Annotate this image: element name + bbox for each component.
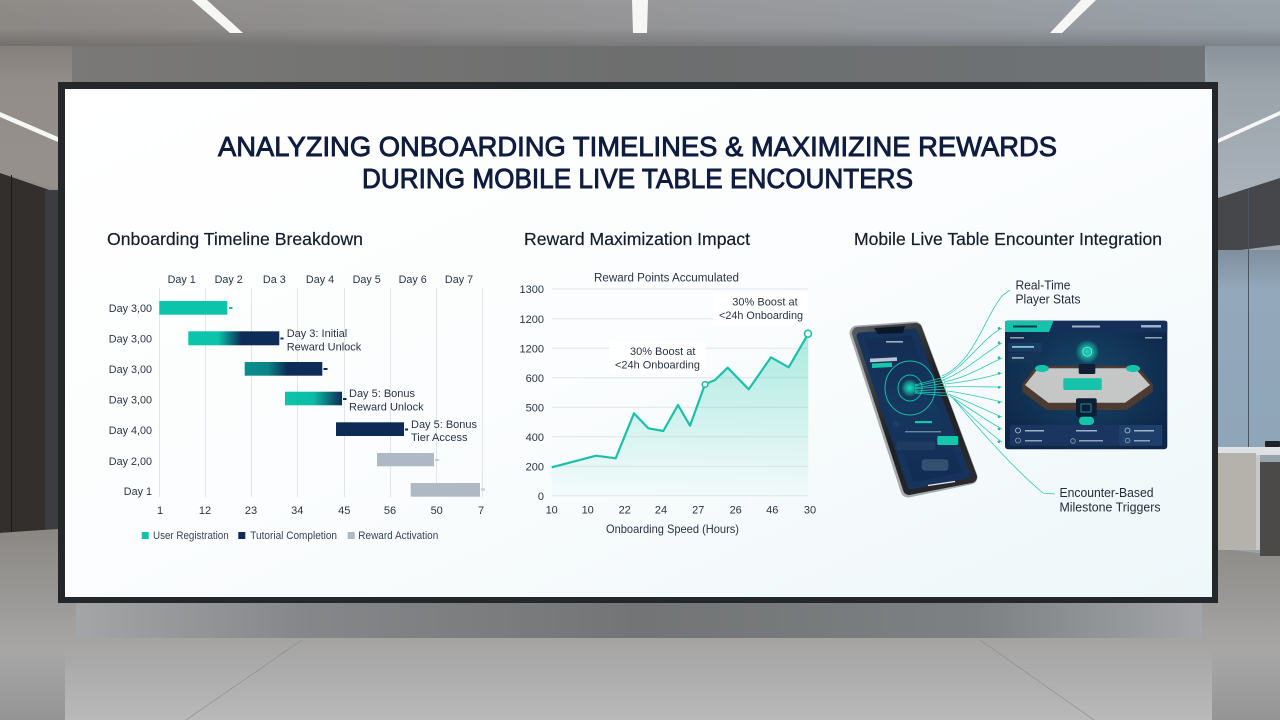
x axis labels: 22 (619, 504, 631, 516)
label: milestone triggers: Milestone Triggers (1060, 500, 1160, 514)
bottom axis: 50 (431, 505, 443, 517)
y axis labels: 200 (526, 462, 544, 474)
x axis labels (546, 504, 816, 516)
day column headers: Da 3 (263, 274, 286, 286)
x axis labels: 10 (582, 504, 594, 516)
dashboard (1005, 321, 1167, 449)
bottom axis: 1 (157, 505, 163, 517)
y axis labels: 500 (526, 402, 544, 414)
bar annotations: Day 5: Bonus (349, 388, 416, 400)
day column headers: Day 4 (306, 274, 334, 286)
row labels (109, 303, 152, 498)
row labels: Day 1 (124, 486, 152, 498)
x axis labels: 46 (766, 504, 778, 516)
y axis labels: 1200 (520, 344, 544, 356)
legend (142, 530, 438, 542)
x axis labels: 27 (692, 504, 704, 516)
y axis labels: 600 (526, 373, 544, 385)
label: real-time stats: Real-Time (1016, 278, 1071, 292)
dashboard stats strip (1010, 425, 1162, 446)
row labels: Day 3,00 (109, 394, 152, 406)
bottom axis: 45 (338, 505, 350, 517)
x axis labels: 30 (804, 504, 816, 516)
day column headers: Day 1 (168, 274, 196, 286)
poker table (1022, 340, 1153, 425)
x axis labels: 24 (655, 504, 667, 516)
bottom axis: 34 (291, 505, 303, 517)
callout: mid boost: <24h Onboarding (615, 359, 700, 371)
bottom axis: 56 (384, 505, 396, 517)
area under line (552, 334, 808, 496)
bar annotations (287, 328, 478, 444)
x axis labels: 26 (730, 504, 742, 516)
x axis title: Onboarding Speed (Hours) (606, 522, 739, 536)
bar annotations: Tier Access (411, 432, 468, 444)
y axis labels: 1200 (520, 314, 544, 326)
bar annotations: Reward Unlock (349, 402, 424, 414)
callout: top boost: <24h Onboarding (719, 310, 803, 322)
label: real-time stats: Player Stats (1016, 292, 1080, 306)
heading: onboarding timeline: Onboarding Timeline Breakdown (107, 229, 363, 249)
day column headers: Day 2 (215, 274, 243, 286)
phone signal rays (915, 377, 949, 396)
row labels: Day 4,00 (109, 425, 152, 437)
y axis labels: 1300 (520, 284, 544, 296)
row labels: Day 2,00 (109, 456, 152, 468)
label: milestone triggers: Encounter-Based (1060, 486, 1154, 500)
panel: onboarding timeline (107, 229, 485, 542)
row labels: Day 3,00 (109, 303, 152, 315)
bar annotations: Day 5: Bonus (411, 419, 478, 431)
day column headers (168, 274, 473, 286)
y axis labels (520, 284, 544, 503)
pedestal (76, 600, 1202, 638)
bottom axis (157, 505, 484, 517)
day column headers: Day 5 (353, 274, 381, 286)
heading: mobile live table: Mobile Live Table Encounter Integration (854, 229, 1162, 249)
legend: User Registration (153, 530, 229, 542)
bar annotations: Day 3: Initial (287, 328, 347, 340)
heading: reward maximization: Reward Maximization Impact (524, 229, 750, 249)
bottom axis: 12 (199, 505, 211, 517)
reward line (552, 334, 808, 467)
title: DURING MOBILE LIVE TABLE ENCOUNTERS (362, 163, 913, 194)
label: real-time stats (1016, 278, 1080, 306)
label: milestone triggers (1060, 486, 1160, 514)
x axis labels: 10 (546, 504, 558, 516)
phone (857, 326, 971, 490)
chart title: Reward Points Accumulated (594, 273, 739, 285)
day column headers: Day 6 (399, 274, 427, 286)
legend: Reward Activation (358, 530, 438, 542)
day column headers: Day 7 (445, 274, 473, 286)
title (218, 131, 1057, 194)
callout: top boost: 30% Boost at (732, 296, 798, 308)
title: ANALYZING ONBOARDING TIMELINES & MAXIMIZINE REWARDS (218, 131, 1057, 162)
panel: reward maximization (520, 229, 816, 536)
display screen (58, 82, 1218, 603)
panel: mobile live table (854, 229, 1167, 514)
bar annotations: Reward Unlock (287, 342, 362, 354)
row labels: Day 3,00 (109, 364, 152, 376)
bottom axis: 7 (478, 505, 484, 517)
gantt bars (159, 301, 485, 497)
callout: mid boost (609, 342, 706, 374)
ceiling lights (0, 0, 1280, 143)
callout: mid boost: 30% Boost at (630, 346, 695, 358)
connector lines (942, 290, 1055, 494)
callout: top boost (713, 292, 808, 326)
data markers (702, 330, 812, 387)
legend: Tutorial Completion (250, 530, 337, 542)
y axis labels: 400 (526, 432, 544, 444)
row labels: Day 3,00 (109, 334, 152, 346)
y axis labels: 0 (538, 491, 544, 503)
bottom axis: 23 (245, 505, 257, 517)
